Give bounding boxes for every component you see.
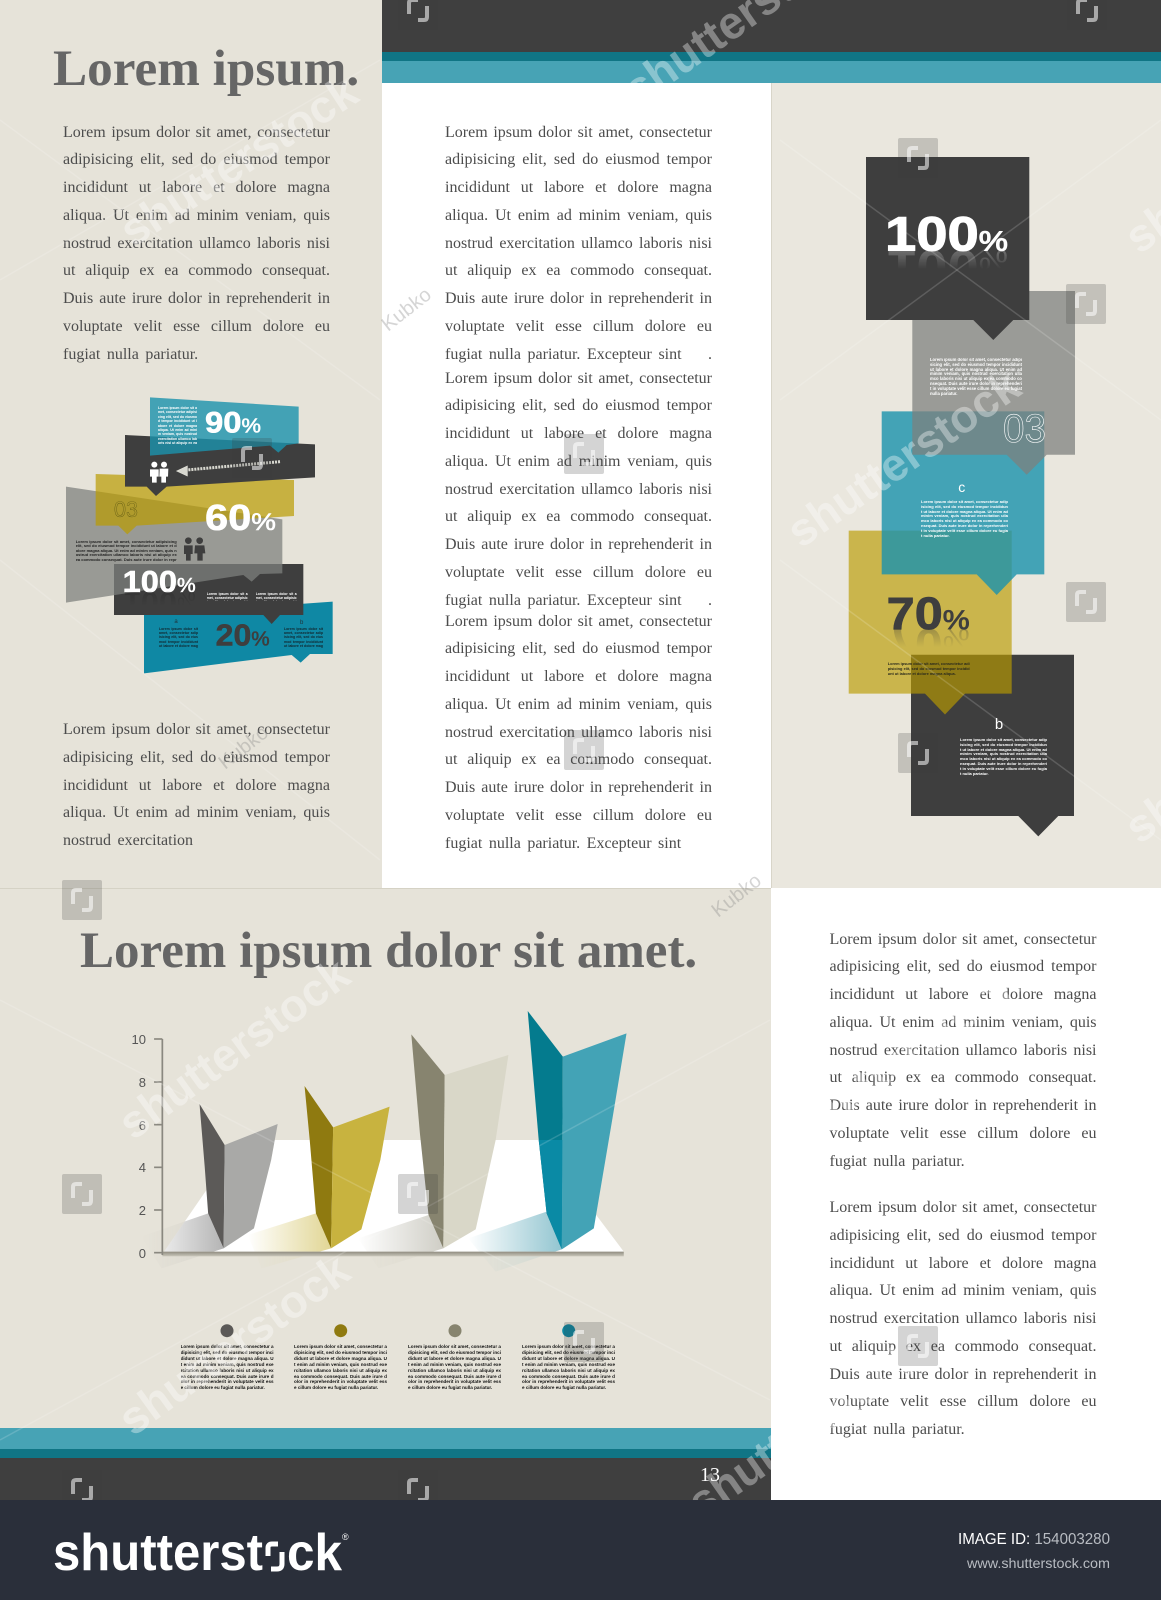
text block: lower right second: nostrud exercitation ullamco laboris nisi (830, 1310, 1096, 1327)
text block: middle third: adipisicing elit, sed do eiusmod tempor (445, 640, 712, 657)
watermark layer: shutterstock (108, 1243, 359, 1445)
axis labels: 6 (139, 1118, 146, 1133)
watermark layer: shutterstock (777, 358, 1030, 557)
text block: middle second: adipisicing elit, sed do eiusmod tempor (445, 397, 712, 414)
chart: stacked callout squares (848, 157, 1075, 836)
label: 60 percent: 60 % (205, 497, 276, 538)
legend item 2: Lorem ipsum dolor sit amet, consectetur adipisicing elit, sed do eiusmod tempor incididunt ut labore et dolore magna aliqua. Ut enim ad minim veniam, quis nostrud exercitation ullamco laboris nisi ut aliquip ex ea commodo consequat. Duis aute irure dolor in reprehenderit in voluptate velit esse cillum dolore eu fugiat nulla pariatur. (294, 1344, 387, 1390)
text: gray callout paragraph: Lorem ipsum dolor sit amet, consectetur adipisicing elit, sed do eiusmod tempor incididunt ut labore et dolore magna aliqua. Ut enim ad minim veniam, quis nostrud exercitation ullamco laboris nisi ut aliquip ex ea commodo consequat. Duis aute irure dolor in reprehenderit in voluptate velit esse cillum dolore eu fugiat nulla pariatur. (930, 358, 1022, 396)
text block: lower right second: fugiat nulla pariatur. (830, 1421, 965, 1438)
panel: bottom teal and dark band (0, 1428, 771, 1500)
text block: lower right first: Lorem ipsum dolor sit amet, consectetur (830, 930, 1096, 948)
text block: middle second: aliqua. Ut enim ad minim veniam, quis (445, 453, 712, 470)
legend item 1 (181, 1324, 274, 1392)
text block: middle second: ut aliquip ex ea commodo consequat. (445, 508, 712, 525)
callout: gray 03 (912, 291, 1075, 475)
text block: middle first: adipisicing elit, sed do eiusmod tempor (445, 151, 712, 168)
axis labels: 0 (139, 1246, 146, 1261)
bar 4 (528, 1011, 627, 1249)
legend item 4 (522, 1324, 615, 1392)
legend item 2 (294, 1324, 387, 1392)
text block: left lower (63, 721, 330, 849)
label: 03 outlined: 03 (1003, 407, 1046, 451)
chart: slanted percent banners: 100% (123, 585, 196, 620)
text block: left lower: aliqua. Ut enim ad minim veniam, quis (63, 804, 330, 821)
axis (154, 1039, 162, 1255)
text block: left intro: incididunt ut labore et dolore magna (63, 179, 330, 196)
watermark layer: Kubko (215, 722, 273, 774)
text block: left intro (63, 124, 330, 362)
icon: people white (150, 462, 168, 483)
text block: left intro: ut aliquip ex ea commodo consequat. (63, 262, 330, 279)
text block: left intro: nostrud exercitation ullamco laboris nisi (63, 234, 330, 252)
footer bar (0, 1500, 1161, 1600)
text block: lower right first: nostrud exercitation ullamco laboris nisi (830, 1042, 1096, 1058)
text block: middle second: Lorem ipsum dolor sit amet, consectetur (445, 370, 712, 386)
text block: middle first: aliqua. Ut enim ad minim veniam, quis (445, 207, 712, 224)
bar 2 (305, 1086, 390, 1248)
panel: top dark header band (382, 0, 1161, 83)
text block: middle first: voluptate velit esse cillum dolore eu (445, 318, 712, 335)
text block: middle third: fugiat nulla pariatur. Excepteur sint (445, 834, 681, 852)
label: 20 percent: 20% (216, 618, 270, 653)
footer logo: ck (287, 1524, 342, 1582)
panel: white middle column (382, 83, 771, 888)
website: www.shutterstock.com (966, 1555, 1110, 1571)
text block: middle first: nostrud exercitation ullamco laboris nisi (445, 234, 712, 252)
chart: slanted percent banners: b (300, 620, 304, 626)
text block: middle first (445, 124, 712, 362)
floor shadows (164, 1212, 562, 1252)
axis labels: 8 (139, 1075, 146, 1090)
text block: left intro: voluptate velit esse cillum dolore eu (63, 318, 330, 335)
axis labels: 10 (132, 1032, 146, 1047)
title: lower heading: Lorem ipsum dolor sit amet. (80, 923, 697, 979)
panel: right beige column (771, 83, 1161, 888)
text block: middle third: ut aliquip ex ea commodo consequat. (445, 751, 712, 768)
legend: four dots with captions (181, 1324, 615, 1390)
text block: middle first: fugiat nulla pariatur. Excepteur sint . (445, 346, 712, 362)
text block: middle second (445, 370, 712, 608)
chart: stacked callout squares: 100 % (885, 240, 1008, 293)
text block: lower right first: adipisicing elit, sed do eiusmod tempor (830, 958, 1096, 975)
text block: middle first: incididunt ut labore et dolore magna (445, 179, 712, 196)
text block: middle third: aliqua. Ut enim ad minim veniam, quis (445, 696, 712, 713)
text block: middle third (445, 612, 712, 852)
text: dark callout paragraph: Lorem ipsum dolor sit amet, consectetur adipisicing elit, sed do eiusmod tempor incididunt ut labore et dolore magna aliqua. Ut enim ad minim veniam, quis nostrud exercitation ullamco laboris nisi ut aliquip ex ea commodo consequat. Duis aute irure dolor in reprehenderit in voluptate velit esse cillum dolore eu fugiat nulla pariatur. (960, 738, 1047, 776)
text block: lower right first: incididunt ut labore et dolore magna (830, 986, 1096, 1003)
text block: middle second: nostrud exercitation ullamco laboris nisi (445, 480, 712, 498)
text block: middle first: ut aliquip ex ea commodo consequat. (445, 262, 712, 279)
chart: 3D folded bars (132, 1011, 626, 1268)
axis labels (132, 1032, 146, 1261)
text block: left intro: Duis aute irure dolor in reprehenderit in (63, 290, 330, 307)
callout: mustard 70 percent (849, 531, 1012, 714)
text block: left intro: Lorem ipsum dolor sit amet, consectetur (63, 124, 330, 140)
text block: left intro: adipisicing elit, sed do eiusmod tempor (63, 151, 330, 168)
image id: IMAGE ID: 154003280 (958, 1531, 1110, 1548)
callout: dark b (911, 655, 1074, 836)
label: c: c (958, 479, 965, 495)
text block: left lower: nostrud exercitation (63, 832, 193, 849)
panel: bottom left beige page (0, 888, 771, 1428)
title: top left heading: Lorem ipsum. (53, 40, 359, 97)
legend item 3: Lorem ipsum dolor sit amet, consectetur adipisicing elit, sed do eiusmod tempor incididunt ut labore et dolore magna aliqua. Ut enim ad minim veniam, quis nostrud exercitation ullamco laboris nisi ut aliquip ex ea commodo consequat. Duis aute irure dolor in reprehenderit in voluptate velit esse cillum dolore eu fugiat nulla pariatur. (408, 1344, 501, 1390)
off-floor faint shadows (141, 1212, 562, 1272)
label: 70 percent: 70% (887, 588, 970, 639)
legend item 3 (408, 1324, 501, 1392)
text block: left lower: Lorem ipsum dolor sit amet, consectetur (63, 721, 330, 738)
label: 03 outlined: 03 (114, 497, 138, 522)
text block: left intro: aliqua. Ut enim ad minim veniam, quis (63, 207, 330, 224)
chart: slanted percent banners: a (174, 619, 178, 625)
text block: middle second: Duis aute irure dolor in reprehenderit in (445, 536, 712, 553)
text block: middle first: Lorem ipsum dolor sit amet, consectetur (445, 124, 712, 140)
text block: lower right first: Duis aute irure dolor in reprehenderit in (830, 1097, 1096, 1114)
text block: lower right first: ut aliquip ex ea commodo consequat. (830, 1069, 1096, 1086)
text block: middle third: incididunt ut labore et dolore magna (445, 668, 712, 685)
text block: middle second: voluptate velit esse cillum dolore eu (445, 564, 712, 581)
chart: slanted percent banners (66, 397, 333, 674)
text block: left intro: fugiat nulla pariatur. (63, 346, 198, 362)
text block: middle first: Duis aute irure dolor in reprehenderit in (445, 290, 712, 307)
label: 100 percent: 100 % (885, 209, 1008, 262)
callout: teal c (882, 411, 1044, 595)
legend item 1: Lorem ipsum dolor sit amet, consectetur adipisicing elit, sed do eiusmod tempor incididunt ut labore et dolore magna aliqua. Ut enim ad minim veniam, quis nostrud exercitation ullamco laboris nisi ut aliquip ex ea commodo consequat. Duis aute irure dolor in reprehenderit in voluptate velit esse cillum dolore eu fugiat nulla pariatur. (181, 1344, 274, 1390)
panel: bottom right white column (771, 888, 1161, 1500)
text block: lower right second: aliqua. Ut enim ad minim veniam, quis (830, 1282, 1096, 1299)
icon: people dark (184, 537, 205, 561)
axis labels: 2 (139, 1203, 146, 1218)
text block: middle third: Lorem ipsum dolor sit amet, consectetur (445, 612, 712, 630)
label: 90 percent: 90% (205, 407, 261, 440)
legend item 4: Lorem ipsum dolor sit amet, consectetur adipisicing elit, sed do eiusmod tempor incididunt ut labore et dolore magna aliqua. Ut enim ad minim veniam, quis nostrud exercitation ullamco laboris nisi ut aliquip ex ea commodo consequat. Duis aute irure dolor in reprehenderit in voluptate velit esse cillum dolore eu fugiat nulla pariatur. (522, 1344, 615, 1390)
footer logo: ® (342, 1532, 349, 1542)
text block: lower right second: Duis aute irure dolor in reprehenderit in (830, 1366, 1096, 1382)
label: b: b (995, 716, 1003, 733)
text block: lower right second: voluptate velit esse cillum dolore eu (830, 1393, 1096, 1410)
text: teal callout paragraph: Lorem ipsum dolor sit amet, consectetur adipisicing elit, sed do eiusmod tempor incididunt ut labore et dolore magna aliqua. Ut enim ad minim veniam, quis nostrud exercitation ullamco laboris nisi ut aliquip ex ea commodo consequat. Duis aute irure dolor in reprehenderit in voluptate velit esse cillum dolore eu fugiat nulla pariatur. (921, 500, 1008, 538)
footer logo: shutterst (53, 1524, 263, 1582)
chart: stacked callout squares: 70% (887, 619, 970, 670)
watermark layer: shutterstock (110, 64, 367, 256)
text block: middle second: incididunt ut labore et dolore magna (445, 425, 712, 442)
text block: left lower: adipisicing elit, sed do eiusmod tempor (63, 749, 330, 766)
bar 3 (411, 1034, 508, 1248)
bar 1 (200, 1104, 278, 1248)
text block: lower right second: adipisicing elit, sed do eiusmod tempor (830, 1227, 1096, 1244)
text block: lower right first: voluptate velit esse cillum dolore eu (830, 1125, 1096, 1142)
text block: lower right second: Lorem ipsum dolor sit amet, consectetur (830, 1199, 1096, 1216)
text block: lower right second (830, 1199, 1096, 1438)
callout: dark 100 percent (866, 157, 1029, 340)
text block: lower right first: aliqua. Ut enim ad minim veniam, quis (830, 1014, 1096, 1031)
text block: middle third: Duis aute irure dolor in reprehenderit in (445, 779, 712, 796)
watermark layer: Kubko (378, 284, 436, 336)
floor plane (164, 1140, 624, 1252)
text block: middle third: voluptate velit esse cillum dolore eu (445, 807, 712, 824)
text block: lower right second: incididunt ut labore et dolore magna (830, 1254, 1096, 1272)
text block: lower right first: fugiat nulla pariatur. (830, 1152, 965, 1170)
text block: left lower: incididunt ut labore et dolore magna (63, 776, 330, 794)
page number: 13 (700, 1464, 720, 1486)
axis labels: 4 (139, 1160, 146, 1175)
panel: top left beige page (0, 0, 382, 888)
text block: middle second: fugiat nulla pariatur. Excepteur sint . (445, 592, 712, 608)
arrow (177, 462, 280, 476)
watermark layer: shutterstock (108, 947, 359, 1149)
label: 100 percent: 100% (123, 564, 196, 599)
text block: middle third: nostrud exercitation ullamco laboris nisi (445, 724, 712, 740)
watermark layer: shutterstock (777, 954, 1030, 1153)
watermark layer: Kubko (708, 870, 766, 922)
text block: lower right first (830, 930, 1096, 1170)
text block: lower right second: ut aliquip ex ea commodo consequat. (830, 1338, 1096, 1355)
